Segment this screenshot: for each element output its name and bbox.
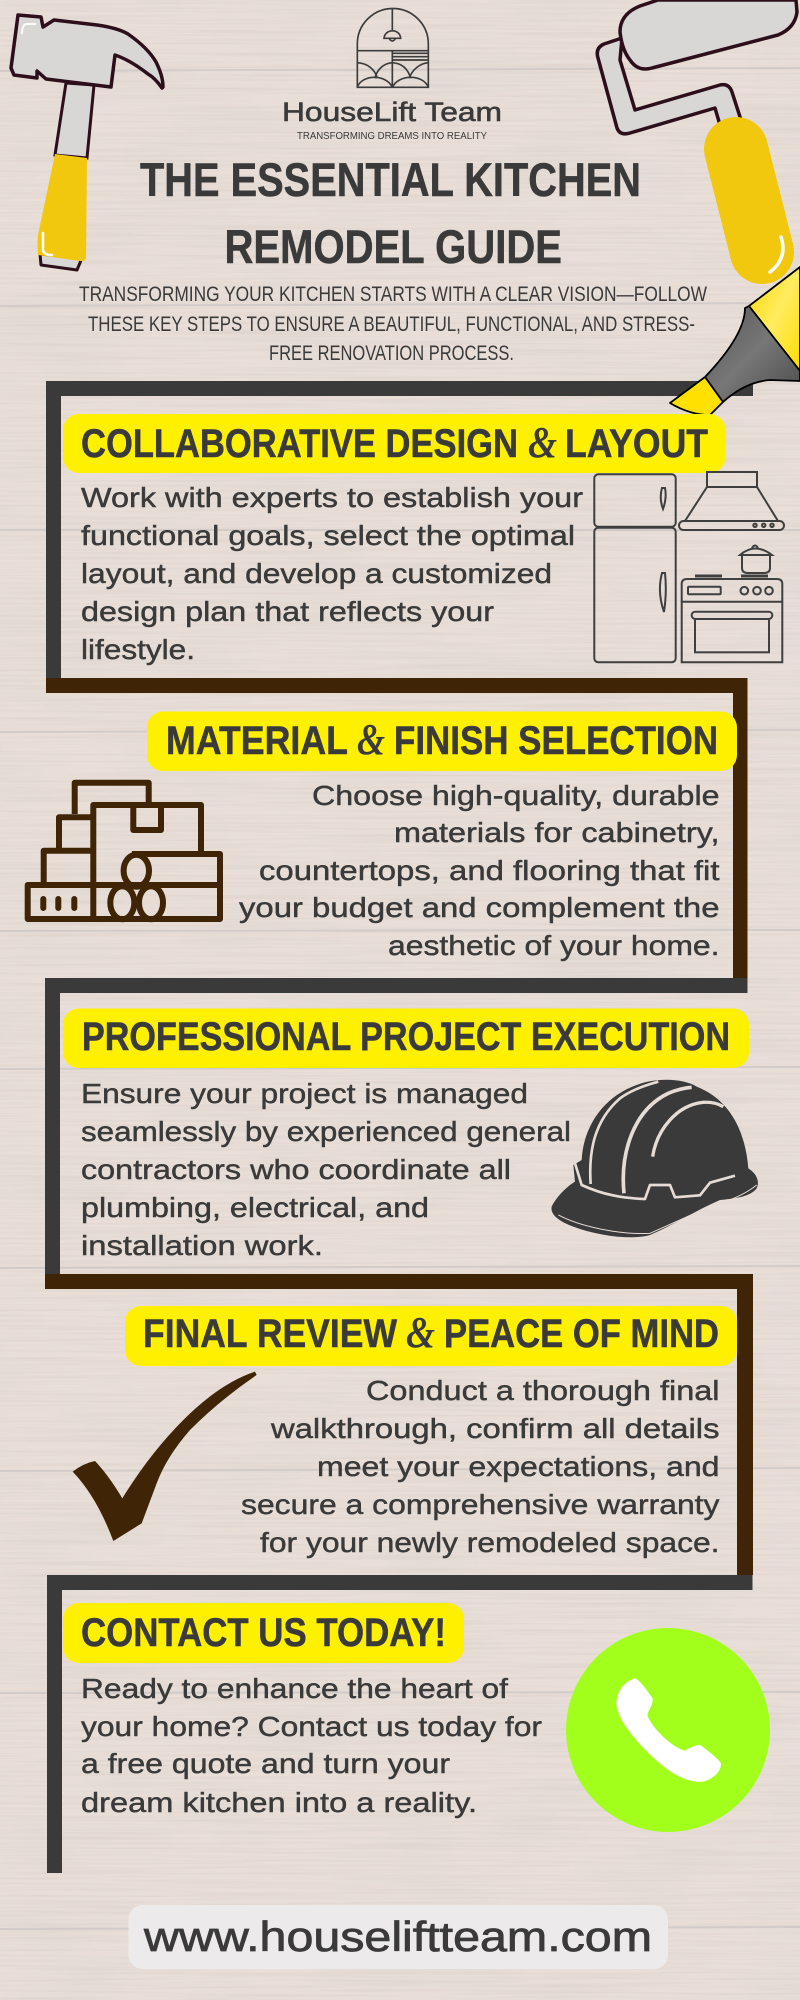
body text 3: contractors who coordinate all [81,1154,511,1185]
panel: material and finish selection [28,712,737,961]
body text 2: countertops, and flooring that fit [259,855,720,886]
body text 5 [81,1673,542,1818]
heading pill 4 [125,1306,737,1366]
heading pill 4: & [406,1308,435,1357]
icon: hard hat [551,1080,758,1237]
body text 1: lifestyle. [81,634,195,665]
heading pill 1: COLLABORATIVE DESIGN [81,422,518,466]
body text 2: aesthetic of your home. [388,930,720,961]
body text 1: functional goals, select the optimal [81,520,575,551]
step 4 frame [45,1274,753,1575]
icon: check mark [73,1372,257,1541]
icon: stacked materials [28,783,220,919]
panel: final review and peace of mind [73,1306,737,1558]
body text 2: materials for cabinetry, [394,817,720,848]
body text 2: your budget and complement the [239,892,720,923]
body text 5: your home? Contact us today for [81,1711,542,1742]
body text 1: design plan that reflects your [81,596,494,627]
body text 1: layout, and develop a customized [81,558,552,589]
heading pill 4: FINAL REVIEW [143,1312,398,1356]
body text 3: installation work. [81,1230,323,1261]
body text 2: Choose high-quality, durable [312,780,720,811]
body text 4: secure a comprehensive warranty [241,1489,720,1520]
heading pill 1 [63,414,726,473]
subtitle [79,283,707,365]
body text 4 [241,1375,720,1558]
heading pill 2: FINISH SELECTION [394,719,718,763]
step 5 frame [47,1575,752,1873]
title: THE ESSENTIAL KITCHEN [140,153,641,206]
heading pill 1: & [528,418,557,467]
website pill: www.houseliftteam.com [143,1913,652,1960]
icon: hammer [11,15,163,270]
heading pill 2 [147,712,737,771]
step 1 frame [46,381,753,678]
logo: arched window mark [357,8,428,87]
body text 5: Ready to enhance the heart of [81,1673,508,1704]
panel: professional project execution [63,1008,758,1261]
heading pill 4: PEACE OF MIND [444,1312,719,1356]
website pill [128,1905,668,1969]
heading pill 1: LAYOUT [565,422,708,466]
heading pill 5 [63,1603,464,1663]
body text 2 [239,780,720,961]
body text 4: walkthrough, confirm all details [270,1413,720,1444]
panel: collaborative design and layout [63,414,784,665]
body text 3: Ensure your project is managed [81,1078,528,1109]
body text 5: dream kitchen into a reality. [81,1787,477,1818]
title: REMODEL GUIDE [224,220,562,273]
heading pill 5: CONTACT US TODAY! [81,1611,446,1655]
body text 1 [81,482,583,665]
step 2 frame [46,678,748,979]
body text 5: a free quote and turn your [81,1748,450,1779]
body text 4: for your newly remodeled space. [260,1527,720,1558]
brand name: HouseLift Team [282,97,502,127]
subtitle: FREE RENOVATION PROCESS. [269,342,514,365]
icon: paint roller [597,0,797,272]
heading pill 3 [63,1008,749,1068]
body text 3 [81,1078,571,1261]
tagline: TRANSFORMING DREAMS INTO REALITY [297,130,487,142]
body text 4: meet your expectations, and [317,1451,720,1482]
heading pill 2: MATERIAL [166,719,348,763]
body text 1: Work with experts to establish your [81,482,583,513]
heading pill 2: & [357,715,385,764]
icon: highlighter [670,267,800,415]
title [140,153,641,273]
icon: phone in green circle [566,1628,770,1832]
body text 3: seamlessly by experienced general [81,1116,571,1147]
step 3 frame [45,978,748,1277]
body text 3: plumbing, electrical, and [81,1192,429,1223]
panel: contact us [63,1603,770,1832]
body text 4: Conduct a thorough final [366,1375,720,1406]
icon: kitchen appliances [594,472,784,662]
